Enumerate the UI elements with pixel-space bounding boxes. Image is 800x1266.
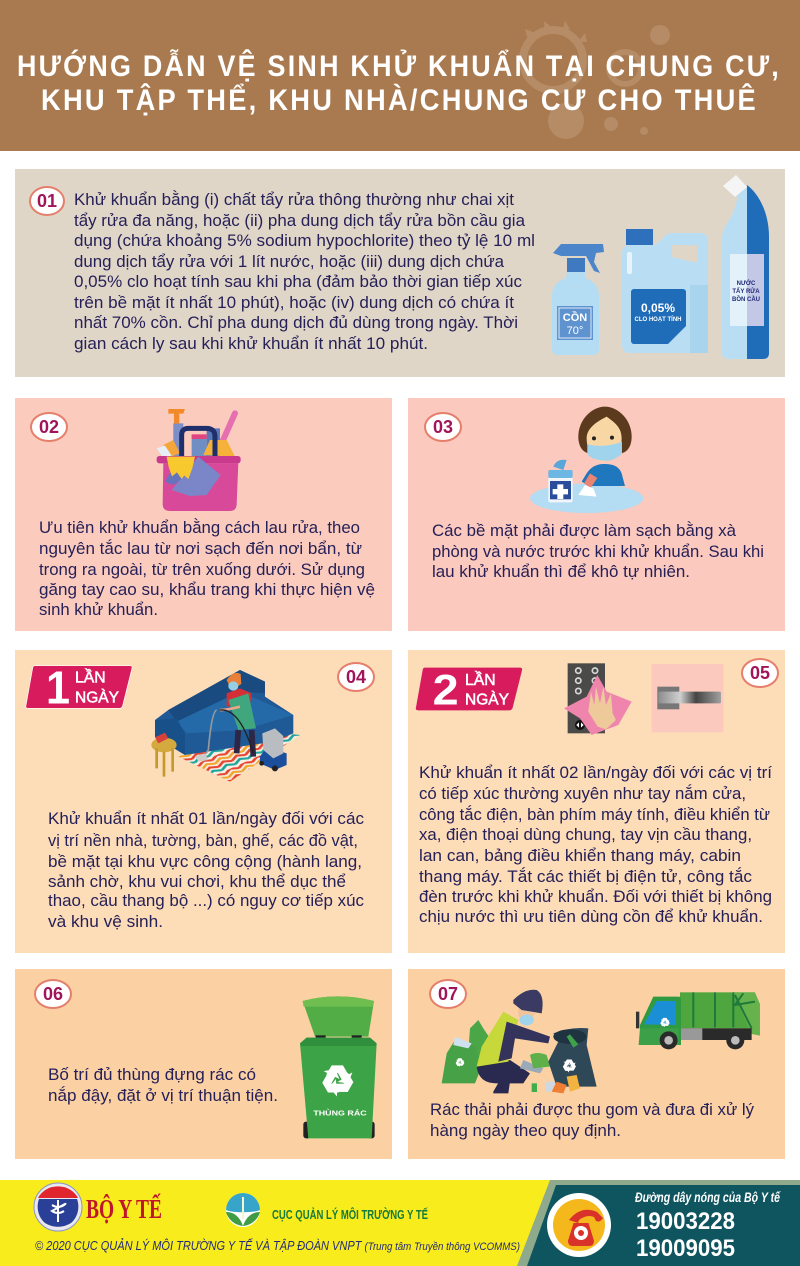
badge: 2 times per day: NGÀY <box>465 691 509 708</box>
panel 06: trash bins <box>15 969 392 1159</box>
panel 04: once a day <box>15 650 392 953</box>
panel 05: twice a day <box>408 650 785 953</box>
panel 03: clean surfaces <box>408 398 785 631</box>
text 06 <box>48 1065 278 1105</box>
badge: 1 time per day: NGÀY <box>75 689 119 706</box>
text 03: lau khử khuẩn thì để khô tự nhiên. <box>432 562 690 581</box>
hotline numbers: 19003228 <box>636 1208 735 1235</box>
text 05 <box>419 763 772 926</box>
text 04 <box>48 809 364 931</box>
text 04: sảnh chờ, khu vui chơi, khu thể dục thể <box>48 872 346 891</box>
text 03 <box>432 521 764 581</box>
icon: garbage truck <box>636 992 760 1049</box>
header banner <box>0 0 800 151</box>
text 05: thang máy. Tắt các thiết bị điện tử, công tắc <box>419 867 752 886</box>
badge 04: 04 <box>346 667 366 687</box>
badge: 2 times per day: 2 <box>433 666 459 714</box>
badge 06: 06 <box>43 984 63 1004</box>
text 01: gian cách ly sau khi khử khuẩn ít nhất 10 phút. <box>74 334 428 353</box>
badge 04 <box>338 663 374 691</box>
text 02: trong ra ngoài, từ trên xuống dưới. Sử dụng <box>39 560 365 579</box>
text 04: vị trí nền nhà, tường, bàn, ghế, các đồ vật, <box>48 831 358 850</box>
text 02: Ưu tiên khử khuẩn bằng cách lau rửa, theo <box>39 518 360 537</box>
hotline numbers: 19009095 <box>636 1235 735 1262</box>
text 01: trên bề mặt ít nhất 10 phút), hoặc (iv) dung dịch có chứa ít <box>74 293 514 312</box>
icon: toilet cleaner bottle <box>722 175 769 359</box>
icon: chlorine jug: 0,05% <box>641 301 675 315</box>
text 04: bề mặt tại khu vực công cộng (hành lang, <box>48 852 362 871</box>
icon: wiping elevator panel <box>564 663 632 735</box>
badge 02: 02 <box>39 417 59 437</box>
text 07: hàng ngày theo quy định. <box>430 1121 621 1140</box>
icon: telephone <box>547 1193 611 1257</box>
icon: cleaning basket <box>157 409 241 511</box>
icon: chlorine jug <box>622 229 708 353</box>
badge: 2 times per day: LẦN <box>465 672 496 689</box>
icon: green trash bin <box>300 996 377 1138</box>
badge 07 <box>430 980 466 1008</box>
text 01: dụng (chứa khoảng 5% sodium hypochlorite) theo tỷ lệ 10 ml <box>74 231 535 250</box>
logo: Bộ Y tế <box>34 1183 162 1231</box>
icon: green trash bin: THÙNG RÁC <box>313 1109 367 1118</box>
icon: woman wiping table <box>530 407 643 513</box>
text 02: nguyên tắc lau từ nơi sạch đến nơi bẩn, từ <box>39 539 362 558</box>
panel 02: wiping principle <box>15 398 392 631</box>
hotline numbers <box>636 1208 735 1262</box>
text 07 <box>430 1100 754 1140</box>
decorative gears <box>523 21 670 139</box>
text 01: 0,05% clo hoạt tính sau khi pha (đảm bảo thời gian tiếp xúc <box>74 272 522 291</box>
text 05: có tiếp xúc thường xuyên như tay nắm cửa, <box>419 784 746 803</box>
icon: spray bottle <box>552 244 604 355</box>
text 01: nhất 70% cồn. Chỉ pha dung dịch đủ dùng trong ngày. Thời <box>74 313 518 332</box>
panel 01: disinfectant solutions <box>15 169 785 377</box>
logo: Bộ Y tế: BỘ Y TẾ <box>86 1193 162 1224</box>
icon: chlorine jug: CLO HOẠT TÍNH <box>634 315 682 323</box>
badge 01: 01 <box>37 191 57 211</box>
text 01: dung dịch tẩy rửa với 1 lít nước, hoặc (iii) dung dịch chứa <box>74 252 505 271</box>
title <box>17 49 781 117</box>
badge 06 <box>35 980 71 1008</box>
badge 01 <box>30 187 64 215</box>
text 01: Khử khuẩn bằng (i) chất tẩy rửa thông thường như chai xịt <box>74 190 514 209</box>
text 05: công tắc điện, bàn phím máy tính, điều khiển từ <box>419 805 770 824</box>
icon: worker collecting waste <box>442 990 597 1093</box>
text 05: xa, điện thoại dùng chung, tay vịn cầu thang, <box>419 825 752 844</box>
text 06: Bố trí đủ thùng đựng rác có <box>48 1065 256 1084</box>
text 04: Khử khuẩn ít nhất 01 lần/ngày đối với các <box>48 809 364 828</box>
icon: toilet cleaner bottle: TẨY RỬA <box>732 288 760 295</box>
text 05: lan can, bảng điều khiển thang máy, cabin <box>419 846 741 865</box>
panel 07: waste collection <box>408 969 785 1159</box>
text 01: tẩy rửa đa năng, hoặc (ii) pha dung dịch tẩy rửa bồn cầu gia <box>74 211 526 230</box>
text 02: găng tay cao su, khẩu trang khi thực hiện vệ <box>39 580 375 599</box>
badge 02 <box>31 413 67 441</box>
badge: 2 times per day <box>416 666 522 714</box>
icon: toilet cleaner bottle: NƯỚC <box>737 279 756 287</box>
text 01 <box>74 190 535 353</box>
text 03: Các bề mặt phải được làm sạch bằng xà <box>432 521 737 540</box>
text 02 <box>39 518 375 619</box>
text 05: Khử khuẩn ít nhất 02 lần/ngày đối với các vị trí <box>419 763 772 782</box>
badge: 1 time per day <box>26 661 132 713</box>
footer <box>0 1180 800 1266</box>
icon: cleaner vacuuming a sofa <box>151 670 300 782</box>
hotline block <box>517 1180 800 1266</box>
text 02: sinh khử khuẩn. <box>39 600 158 619</box>
text 06: nắp đậy, đặt ở vị trí thuận tiện. <box>48 1086 278 1105</box>
icon: door handle <box>652 664 723 732</box>
text 05: đèn trước khi khử khuẩn. Đối với thiết bị không <box>419 887 772 906</box>
text 04: và khu vệ sinh. <box>48 912 163 931</box>
icon: spray bottle: CỒN <box>563 311 587 324</box>
badge: 1 time per day: LẦN <box>75 670 106 687</box>
icon: spray bottle: 70° <box>567 325 583 337</box>
text 07: Rác thải phải được thu gom và đưa đi xử lý <box>430 1100 754 1119</box>
badge 05 <box>742 659 778 687</box>
badge 03 <box>425 413 461 441</box>
badge 03: 03 <box>433 417 453 437</box>
text 03: phòng và nước trước khi khử khuẩn. Sau khi <box>432 542 764 561</box>
text 04: thao, cầu thang bộ ...) có nguy cơ tiếp xúc <box>48 891 364 910</box>
logo: Cục Quản lý môi trường y tế <box>226 1193 428 1227</box>
badge 05: 05 <box>750 663 770 683</box>
badge: 1 time per day: 1 <box>46 661 70 713</box>
text 05: chịu nước thì ưu tiên dùng cồn để khử khuẩn. <box>419 907 763 926</box>
badge 07: 07 <box>438 984 458 1004</box>
copyright: © 2020 CỤC QUẢN LÝ MÔI TRƯỜNG Y TẾ VÀ TẬP ĐOÀN VNPT (Trung tâm Truyền thông VCOMMS) <box>35 1238 520 1253</box>
logo: Cục Quản lý môi trường y tế: CỤC QUẢN LÝ MÔI TRƯỜNG Y TẾ <box>272 1207 428 1222</box>
icon: toilet cleaner bottle: BỒN CẦU <box>732 296 760 303</box>
